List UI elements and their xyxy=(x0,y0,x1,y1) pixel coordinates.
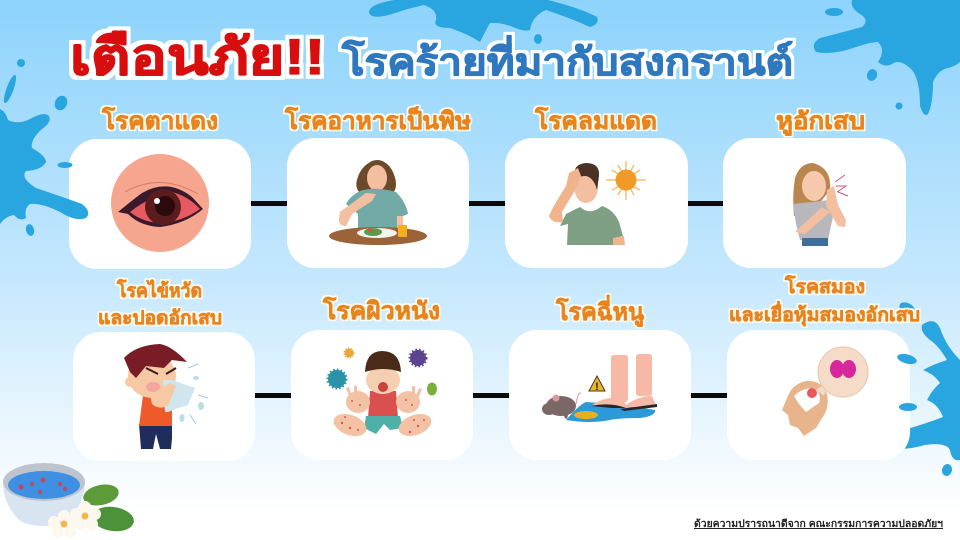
icon: child with skin disease and germs xyxy=(328,348,437,440)
card: หูอักเสบ xyxy=(723,138,906,268)
splash: left water xyxy=(0,59,88,237)
connector lines row 2 xyxy=(255,393,727,398)
label: โรคผิวหนัง: โรคผิวหนัง xyxy=(322,296,440,325)
footer note: ด้วยความปรารถนาดีจาก คณะกรรมการความปลอดภัยฯ xyxy=(694,518,943,530)
icon: red eye xyxy=(111,154,209,252)
icon: silver water bowl with leaves and flowers xyxy=(3,463,135,538)
title: warning: เตือนภัย!! xyxy=(70,29,325,85)
splash droplets over last card xyxy=(896,300,918,411)
label: หูอักเสบ: หูอักเสบ xyxy=(776,108,865,136)
label: โรคลมแดด: โรคลมแดด xyxy=(534,106,657,135)
label: โรคสมอง และเยื่อหุ้มสมองอักเสบ: โรคสมอง xyxy=(784,275,865,298)
card: โรคลมแดด xyxy=(505,138,688,268)
splash: top centre water xyxy=(369,0,598,44)
label: โรคไข้หวัด และปอดอักเสบ: โรคไข้หวัด xyxy=(116,279,202,302)
icon: woman with ear pain xyxy=(793,163,848,246)
card: โรคผิวหนัง xyxy=(291,330,473,460)
splash: top right water xyxy=(814,0,960,115)
icon: rat, puddle and feet in sandals: ! xyxy=(595,381,599,393)
card: โรคฉี่หนู xyxy=(509,330,691,460)
icon: sneezing man xyxy=(124,344,208,449)
label: โรคฉี่หนู: โรคฉี่หนู xyxy=(555,294,645,327)
icon: brain with bacteria xyxy=(782,347,868,436)
splash: bottom right water xyxy=(889,321,960,477)
label: โรคไข้หวัด และปอดอักเสบ: และปอดอักเสบ xyxy=(98,308,222,329)
title: subtitle: โรคร้ายที่มากับสงกรานต์ xyxy=(341,35,793,84)
card: โรคตาแดง xyxy=(69,139,251,269)
icon: man with heatstroke and sun xyxy=(549,161,646,245)
card: โรคอาหารเป็นพิษ xyxy=(287,138,469,268)
label: โรคไข้หวัด และปอดอักเสบ xyxy=(98,279,222,329)
label: โรคอาหารเป็นพิษ: โรคอาหารเป็นพิษ xyxy=(284,106,471,135)
card: โรคไข้หวัด xyxy=(73,332,255,461)
label: โรคตาแดง: โรคตาแดง xyxy=(101,106,218,135)
connector lines row 1 xyxy=(251,201,723,206)
icon: woman with food poisoning xyxy=(329,160,427,245)
label: โรคสมอง และเยื่อหุ้มสมองอักเสบ xyxy=(729,275,920,327)
label: โรคสมอง และเยื่อหุ้มสมองอักเสบ: และเยื่อหุ้มสมองอักเสบ xyxy=(729,301,920,327)
icon: rat, puddle and feet in sandals xyxy=(542,354,657,422)
card: โรคสมอง xyxy=(727,330,910,460)
